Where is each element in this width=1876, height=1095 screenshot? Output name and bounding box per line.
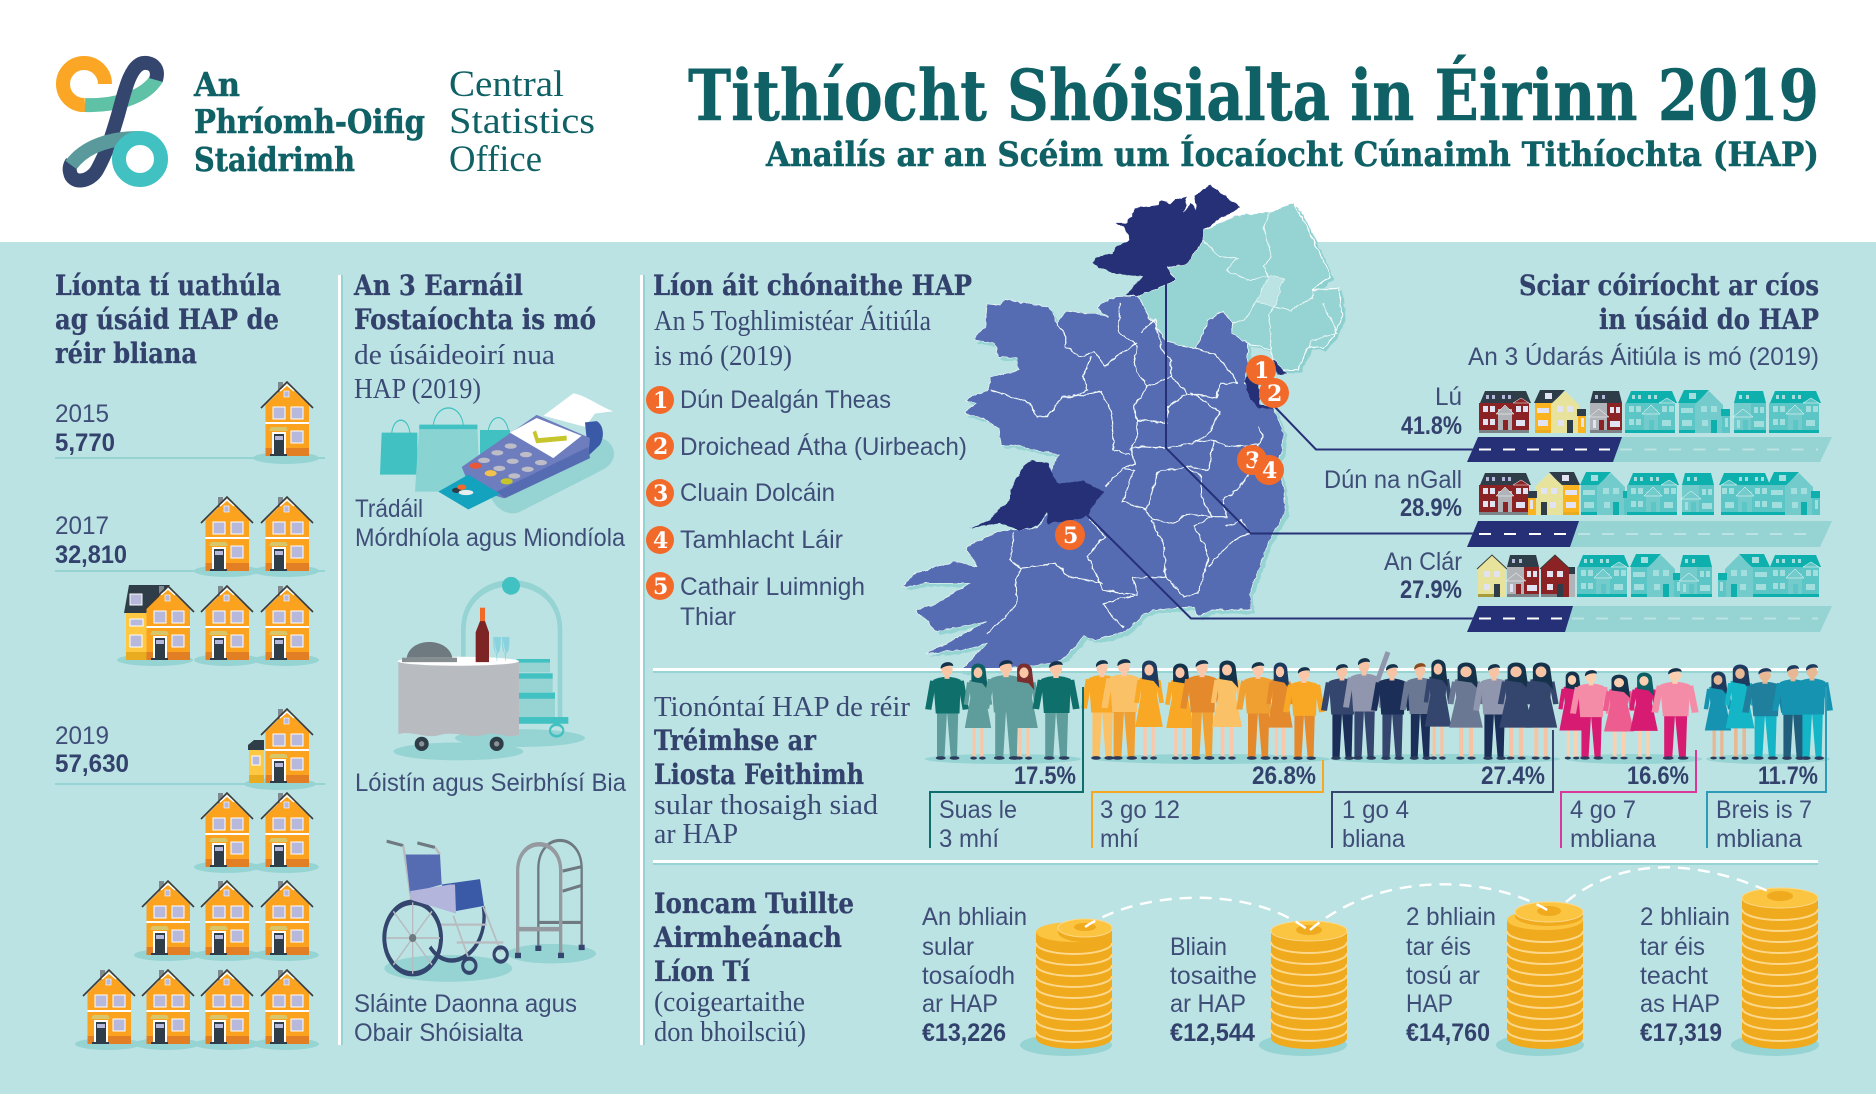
heading: [1519, 269, 1819, 336]
brackets: [930, 687, 1826, 848]
county values: Lú: [1435, 383, 1462, 411]
coin labels: €14,760: [1406, 1019, 1490, 1047]
heading: [353, 269, 596, 405]
duration labels: mbliana: [1716, 825, 1802, 853]
icon: CSO knot symbol: [63, 63, 161, 180]
coin labels: [922, 903, 1730, 1047]
houses row: An Clár: [1477, 554, 1821, 597]
duration labels: mhí: [1100, 825, 1139, 853]
coin labels: ar HAP: [922, 990, 998, 1018]
coin labels: teacht: [1640, 962, 1708, 990]
heading: [55, 269, 281, 370]
percentages: 26.8%: [1252, 762, 1316, 790]
duration labels: [939, 796, 1812, 853]
numbered list: Tamhlacht Láir: [680, 526, 843, 554]
year values: 32,810: [55, 541, 127, 569]
panel: unique households by year: [55, 269, 325, 1050]
percentages: [1014, 762, 1818, 790]
text: retail sector: Mórdhíola agus Miondíola: [355, 524, 625, 552]
heading: Líon Tí: [654, 955, 750, 988]
heading: sular thosaigh siad: [654, 790, 878, 821]
coin labels: 2 bhliain: [1640, 903, 1730, 931]
panel: household earned income: [653, 867, 1819, 1056]
leader lines from map to roads: [1087, 265, 1480, 618]
duration labels: Suas le: [939, 796, 1017, 824]
coin labels: €12,544: [1170, 1019, 1255, 1047]
heading: Tionóntaí HAP de réir: [654, 692, 911, 723]
coin labels: An bhliain: [922, 903, 1027, 931]
duration labels: mbliana: [1570, 825, 1656, 853]
logo text: Irish name: [193, 65, 425, 179]
column dividers: [338, 275, 645, 1045]
coin labels: as HAP: [1640, 990, 1720, 1018]
county values: An Clár: [1384, 548, 1462, 576]
heading: de úsáideoirí nua: [354, 340, 556, 371]
map of Ireland: [901, 185, 1346, 675]
text: retail sector: Trádáil: [355, 495, 423, 523]
map markers 1 to 5: 1: [1254, 358, 1269, 384]
logo text: Irish name: An: [193, 65, 240, 104]
county values: 41.8%: [1401, 412, 1462, 440]
year values: 2015: [55, 400, 109, 428]
numbered list: 5: [653, 574, 668, 600]
county values: 27.9%: [1400, 576, 1462, 604]
subheading: An 3 Údarás Áitiúla is mó (2019): [1468, 342, 1819, 371]
panel: top 3 employment sectors: [353, 269, 626, 1047]
numbered list: Cathair Luimnigh: [680, 573, 865, 601]
year values: 5,770: [55, 429, 115, 457]
heading: Tréimhse ar: [654, 724, 817, 757]
percentages: 16.6%: [1627, 762, 1689, 790]
people: over 7 years: [1705, 664, 1830, 760]
people: under 3 months: [928, 660, 1076, 760]
heading: HAP (2019): [354, 374, 481, 405]
houses row: Dún na nGall: [1479, 472, 1820, 515]
numbered list: 2: [653, 434, 668, 460]
percentages: 17.5%: [1014, 762, 1076, 790]
subheading: [654, 306, 932, 372]
subheading: is mó (2019): [654, 341, 792, 372]
numbered list: Droichead Átha (Uirbeach): [680, 432, 967, 461]
duration labels: 3 go 12: [1100, 796, 1180, 824]
county values: [1324, 383, 1462, 604]
heading: don bhoilsciú): [654, 1017, 806, 1048]
section rules: [653, 668, 1818, 865]
percentages: 27.4%: [1481, 762, 1545, 790]
icon: hotel trolley and food cart: [393, 577, 585, 760]
coin labels: tosaíodh: [922, 962, 1015, 990]
logo text: Irish name: Phríomh-Oifig: [194, 102, 425, 141]
duration labels: Breis is 7: [1716, 796, 1812, 824]
coin labels: Bliain: [1170, 933, 1227, 961]
map markers 1 to 5: [1055, 355, 1289, 550]
coin stack 1: [1036, 919, 1112, 1049]
logo text: English name: Office: [449, 139, 542, 180]
text: retail sector: [355, 495, 625, 552]
heading: [654, 692, 911, 850]
icons: houses 2017: [124, 497, 313, 660]
year values: 2017: [55, 512, 109, 540]
text: health and social work: [354, 990, 577, 1047]
heading: in úsáid do HAP: [1599, 303, 1819, 336]
coin labels: HAP: [1406, 990, 1453, 1018]
coin labels: €13,226: [922, 1019, 1006, 1047]
numbered list: 3: [653, 481, 668, 507]
heading: Líon áit chónaithe HAP: [653, 269, 972, 302]
numbered list: Dún Dealgán Theas: [680, 386, 891, 414]
text: health and social work: Sláinte Daonna agus: [354, 990, 577, 1018]
coin labels: tosaithe: [1170, 962, 1257, 990]
year values: 57,630: [55, 750, 129, 778]
county values: Dún na nGall: [1324, 466, 1462, 494]
icon: shopping bags and card terminal: [380, 393, 614, 513]
numbered list: [646, 386, 967, 631]
logo: Central Statistics Office: [63, 63, 595, 180]
coin labels: tar éis: [1640, 933, 1705, 961]
footer strip: [0, 1094, 1876, 1095]
heading: ar HAP: [654, 819, 738, 850]
percentages: 11.7%: [1758, 762, 1818, 790]
coin labels: 2 bhliain: [1406, 903, 1496, 931]
logo text: English name: [449, 64, 595, 180]
panel: share of rental accommodation: [1324, 269, 1832, 632]
heading: Ioncam Tuillte: [654, 887, 854, 920]
dashed arrows between stacks: [1085, 867, 1770, 930]
heading: Liosta Feithimh: [654, 758, 864, 791]
heading: An 3 Earnáil: [353, 269, 523, 302]
year values: [55, 400, 129, 778]
panel: number of HAP dwellings by LEA: [646, 269, 972, 631]
numbered list: Cluain Dolcáin: [680, 479, 835, 507]
numbered list: 1: [653, 388, 668, 414]
duration labels: 3 mhí: [939, 825, 999, 853]
duration labels: 4 go 7: [1570, 796, 1636, 824]
coin stack 3: [1507, 902, 1583, 1049]
heading: (coigeartaithe: [654, 987, 805, 1018]
logo text: English name: Statistics: [449, 101, 595, 142]
coin labels: €17,319: [1640, 1019, 1722, 1047]
text: accommodation and food: Lóistín agus Seirbhísí Bia: [355, 769, 626, 797]
house shadows: [75, 452, 319, 1050]
icons: houses 2015: [261, 382, 313, 456]
coin labels: tosú ar: [1406, 962, 1480, 990]
logo text: English name: Central: [449, 64, 564, 105]
coin shadows: [1020, 1034, 1819, 1056]
heading: Airmheánach: [653, 921, 842, 954]
year rules: [55, 457, 325, 785]
roads as percentage bars: [1467, 437, 1832, 632]
heading: ag úsáid HAP de: [55, 303, 279, 336]
ground shadows: [925, 754, 1830, 764]
numbered list: Thiar: [680, 603, 736, 631]
map markers 1 to 5: 3: [1245, 448, 1260, 474]
houses row: Lú: [1479, 390, 1821, 433]
coin stack 4: [1742, 888, 1818, 1049]
heading: réir bliana: [55, 337, 197, 370]
duration labels: bliana: [1342, 825, 1405, 853]
numbered list: 4: [653, 528, 668, 554]
people: 3 to 12 months: [1084, 659, 1322, 760]
heading: Sciar cóiríocht ar cíos: [1519, 269, 1819, 302]
subheading: An 5 Toghlimistéar Áitiúla: [654, 306, 932, 337]
people: 1 to 4 years: [1324, 652, 1557, 760]
coin labels: ar HAP: [1170, 990, 1246, 1018]
heading: [653, 887, 854, 1048]
people: 4 to 7 years: [1559, 668, 1695, 760]
duration labels: 1 go 4: [1342, 796, 1409, 824]
panel: waiting list period: [654, 652, 1830, 853]
county values: 28.9%: [1400, 494, 1462, 522]
map markers 1 to 5: 2: [1267, 381, 1282, 407]
map markers 1 to 5: 4: [1262, 458, 1277, 484]
year values: 2019: [55, 722, 109, 750]
icons: houses 2019: [83, 709, 313, 1044]
coin labels: sular: [922, 933, 974, 961]
heading: Fostaíochta is mó: [354, 303, 596, 336]
heading: Líonta tí uathúla: [55, 269, 281, 302]
logo text: Irish name: Staidrimh: [194, 140, 355, 179]
coin stack 2: [1271, 921, 1347, 1049]
map markers 1 to 5: 5: [1063, 523, 1078, 549]
icon: wheelchair and walking frame: [384, 840, 596, 982]
background panel: [0, 242, 1876, 1095]
text: health and social work: Obair Shóisialta: [354, 1019, 523, 1047]
coin labels: tar éis: [1406, 933, 1471, 961]
